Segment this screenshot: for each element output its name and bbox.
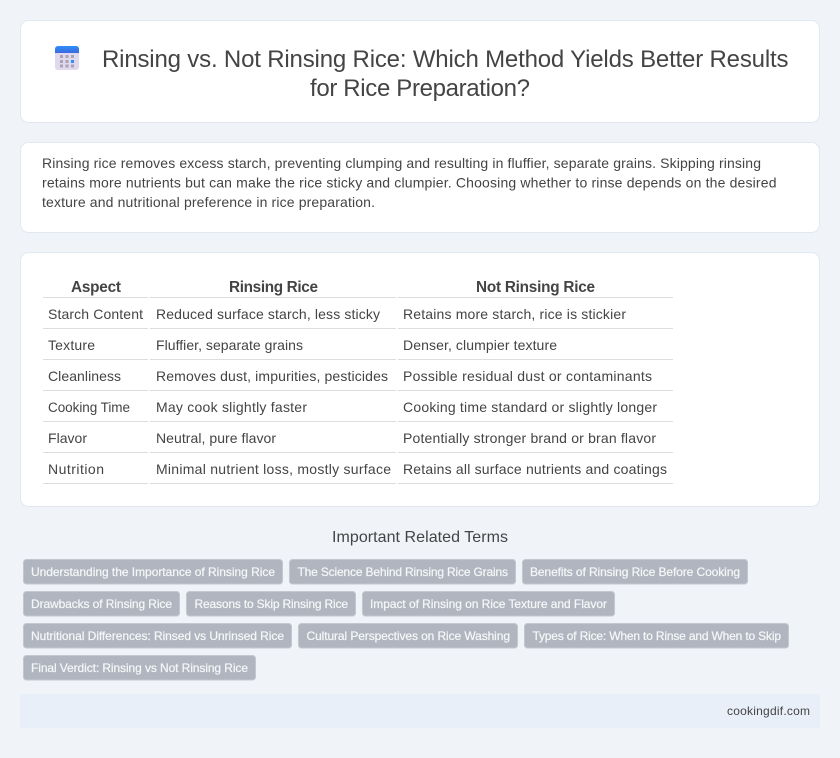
row: texture: Texture [48,337,95,353]
table header: Aspect [71,279,121,296]
heading: related terms: Important Related Terms [332,529,508,546]
tag [24,624,292,648]
related term tags [24,560,788,680]
row: flavor: Neutral, pure flavor [156,430,276,446]
tag [24,592,180,616]
row: starch content: Retains more starch, rice is stickier [403,306,626,322]
tag: Types of Rice: When to Rinse and When to Skip [532,629,781,643]
tag: Final Verdict: Rinsing vs Not Rinsing Rice [31,661,248,675]
row: texture: Denser, clumpier texture [403,337,557,353]
row: nutrition: Minimal nutrient loss, mostly surface [156,461,391,477]
row: starch content: Reduced surface starch, less sticky [156,306,380,322]
tag [362,592,614,616]
tag: Cultural Perspectives on Rice Washing [306,629,510,643]
tag: Benefits of Rinsing Rice Before Cooking [530,565,740,579]
title [102,46,788,102]
tag: Drawbacks of Rinsing Rice [31,597,172,611]
intro paragraph [42,155,776,210]
intro paragraph: texture and nutritional preference in rice preparation. [42,194,375,210]
tag [186,592,356,616]
row: flavor [48,430,656,446]
row: cooking time: Cooking time standard or slightly longer [403,399,657,415]
intro paragraph: retains more nutrients but can make the rice sticky and clumpier. Choosing whether to rinse depends on the desired [42,174,776,190]
tag: Understanding the Importance of Rinsing Rice [31,565,275,579]
row: cooking time: May cook slightly faster [156,399,307,415]
row: texture [48,337,557,353]
panel: title header [20,20,820,122]
table header [71,279,595,296]
row: flavor: Potentially stronger brand or bran flavor [403,430,656,446]
tag: Nutritional Differences: Rinsed vs Unrinsed Rice [31,629,284,643]
title: Rinsing vs. Not Rinsing Rice: Which Method Yields Better Results [102,46,788,73]
row: nutrition [48,461,667,477]
row: nutrition: Retains all surface nutrients and coatings [403,461,667,477]
row: cleanliness: Possible residual dust or contaminants [403,368,652,384]
tag [298,624,518,648]
row: cleanliness: Removes dust, impurities, pesticides [156,368,388,384]
tag: Impact of Rinsing on Rice Texture and Flavor [370,597,607,611]
tag [290,560,516,584]
panel: introduction [20,142,820,232]
row: starch content: Starch Content [48,306,143,322]
row: nutrition: Nutrition [48,461,104,477]
table header: Not Rinsing Rice [476,279,595,296]
row: cleanliness [48,368,652,384]
intro paragraph: Rinsing rice removes excess starch, preventing clumping and resulting in fluffier, separate grains. Skipping rinsing [42,155,761,171]
footer: cookingdif.com [727,704,810,718]
tag [24,560,282,584]
tag [522,560,748,584]
tag: The Science Behind Rinsing Rice Grains [298,565,508,579]
row: texture: Fluffier, separate grains [156,337,303,353]
row: flavor: Flavor [48,430,87,446]
tag: Reasons to Skip Rinsing Rice [194,597,348,611]
tag [24,656,256,680]
tag [524,624,788,648]
row: cooking time [48,399,657,415]
footer [20,694,820,728]
icon: calendar [55,46,79,70]
row: cleanliness: Cleanliness [48,368,121,384]
row: cooking time: Cooking Time [48,400,130,415]
title: for Rice Preparation? [310,75,530,102]
panel: comparison table [20,252,820,506]
row: starch content [48,306,626,322]
table header: Rinsing Rice [229,279,318,296]
